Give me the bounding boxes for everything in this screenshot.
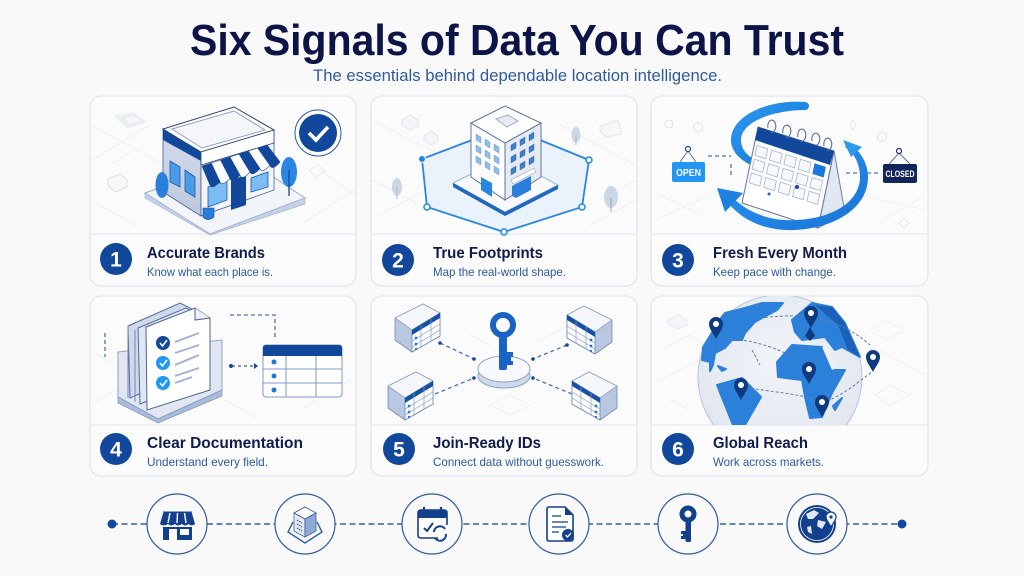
text: Connect data without guesswork. <box>433 455 604 469</box>
sign: closed <box>883 148 917 183</box>
number 6 <box>662 433 694 465</box>
text: Know what each place is. <box>147 265 273 279</box>
icon: check badge <box>295 110 341 156</box>
illustration: globe with pins <box>698 296 880 425</box>
heading: True Footprints <box>433 245 543 262</box>
panel 4: clear documentation <box>90 296 356 476</box>
icon: globe <box>787 494 847 554</box>
text: Work across markets. <box>713 455 824 469</box>
sign: open <box>672 146 705 182</box>
panel 2: true footprints <box>371 96 637 286</box>
heading: Join-Ready IDs <box>433 435 541 452</box>
number 3 <box>662 244 694 276</box>
panel 1: accurate brands <box>90 96 356 286</box>
subtitle: The essentials behind dependable location intelligence. <box>313 67 722 85</box>
text: Understand every field. <box>147 455 268 469</box>
illustration: documents <box>105 303 275 423</box>
panel 3: fresh every month <box>651 96 928 286</box>
number 4 <box>100 433 132 465</box>
illustration: calendar with arrows <box>665 102 917 230</box>
number 6: 6 <box>672 438 684 462</box>
heading: Clear Documentation <box>147 435 303 452</box>
number 3: 3 <box>672 250 684 272</box>
number 4: 4 <box>110 438 122 462</box>
text: Map the real-world shape. <box>433 265 566 279</box>
icon: key <box>658 494 718 554</box>
panel 6: global reach <box>651 295 928 476</box>
number 5 <box>383 433 415 465</box>
heading: Accurate Brands <box>147 245 265 262</box>
illustration: storefront <box>108 107 325 235</box>
title: Six Signals of Data You Can Trust <box>190 16 844 65</box>
illustration: building with footprint <box>392 106 621 235</box>
heading: Fresh Every Month <box>713 245 847 262</box>
lower arrow arc <box>726 143 868 230</box>
number 1: 1 <box>110 248 122 272</box>
icon: calendar refresh <box>402 494 462 554</box>
icon: building <box>275 494 335 554</box>
number 2 <box>382 244 414 276</box>
illustration: table <box>263 345 342 397</box>
icon: document <box>529 494 589 554</box>
number 1 <box>100 243 132 275</box>
illustration: databases linked to key <box>388 304 617 420</box>
awning <box>202 145 280 187</box>
sign: closed: CLOSED <box>886 169 915 179</box>
upper arrow arc <box>731 102 809 165</box>
timeline <box>108 494 906 554</box>
icon: store <box>147 494 207 554</box>
panel 5: join-ready ids <box>371 296 637 476</box>
number 2: 2 <box>392 250 404 272</box>
text: Keep pace with change. <box>713 265 836 279</box>
icon: key <box>493 315 513 370</box>
sign: open: OPEN <box>676 168 701 179</box>
number 5: 5 <box>393 438 405 462</box>
heading: Global Reach <box>713 435 808 452</box>
